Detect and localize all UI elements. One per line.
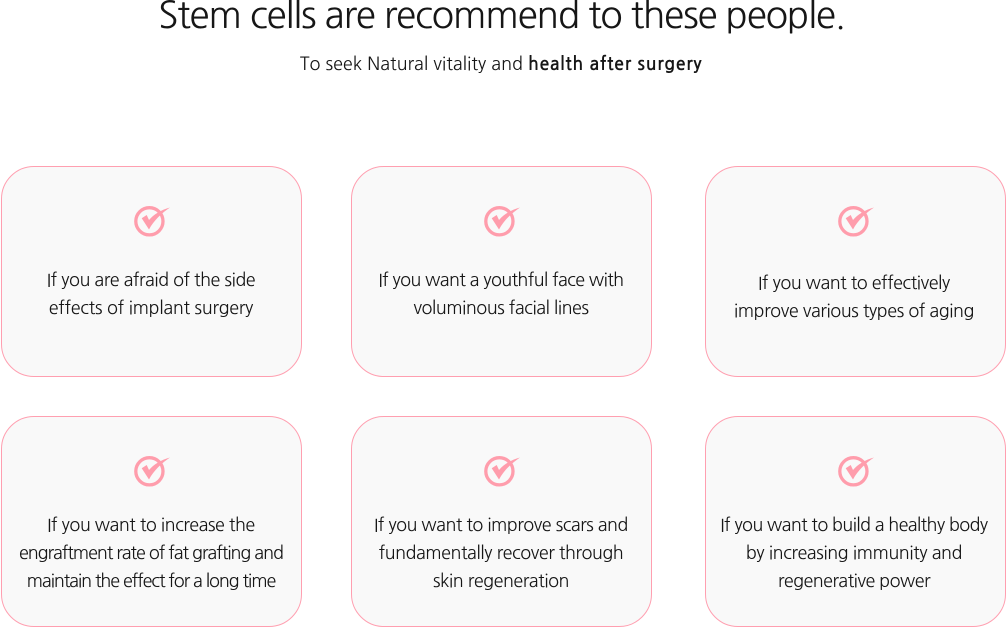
text: fundamentally recover through <box>379 544 623 562</box>
text: effects of implant surgery <box>49 299 253 317</box>
panel: fat grafting <box>1 416 302 627</box>
text <box>734 274 974 320</box>
panel: scars <box>351 416 652 627</box>
text: engraftment rate of fat grafting and <box>19 544 283 562</box>
icon: check mark <box>838 206 874 236</box>
text <box>47 271 255 317</box>
text: If you want to improve scars and <box>374 516 628 534</box>
text: If you want to build a healthy body <box>720 516 988 534</box>
subtitle: To seek Natural vitality and health after surgery <box>300 55 702 73</box>
panel: implant side effects <box>1 166 302 377</box>
text: voluminous facial lines <box>413 299 588 317</box>
text: If you are afraid of the side <box>47 271 255 289</box>
text <box>374 516 628 590</box>
icon: check mark <box>134 206 170 236</box>
panel: youthful face <box>351 166 652 377</box>
text: by increasing immunity and <box>746 544 962 562</box>
text: regenerative power <box>778 572 930 590</box>
icon: check mark <box>838 456 874 486</box>
text: If you want to increase the <box>47 516 255 534</box>
text: If you want a youthful face with <box>378 271 623 289</box>
panel: immunity <box>705 416 1006 627</box>
text: maintain the effect for a long time <box>27 572 275 590</box>
text <box>720 516 988 590</box>
icon: check mark <box>134 456 170 486</box>
icon: check mark <box>484 456 520 486</box>
icon: check mark <box>484 206 520 236</box>
text: improve various types of aging <box>734 302 974 320</box>
text: If you want to effectively <box>758 274 950 292</box>
text: skin regeneration <box>433 572 569 590</box>
panel: aging <box>705 166 1006 377</box>
text <box>19 516 283 590</box>
text <box>378 271 623 317</box>
